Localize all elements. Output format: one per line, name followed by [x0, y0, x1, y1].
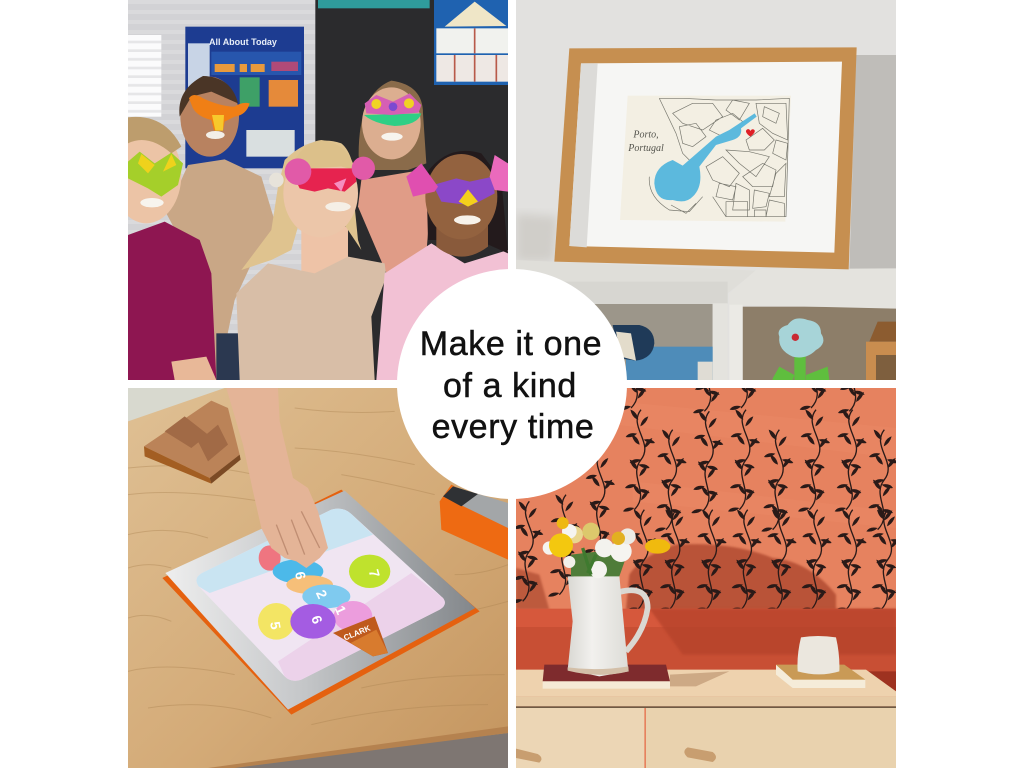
cast shadow on sideboard: [670, 671, 729, 686]
map label second line: Portugal: [627, 143, 664, 154]
magnetic tray: [162, 490, 480, 715]
orange box: [440, 485, 508, 560]
rolled tube: [613, 325, 654, 361]
heart: [746, 129, 755, 137]
wood grain: [128, 408, 508, 725]
heading: of a kind: [443, 367, 577, 405]
tan book: [776, 665, 865, 688]
sideboard: [516, 670, 896, 768]
centre circle callout: [397, 269, 627, 499]
red book: [543, 665, 670, 689]
panel: children wearing colourful masks: [111, 0, 508, 380]
mask: red mouse: [294, 168, 356, 192]
felt flower: [773, 318, 829, 380]
mask: purple with pink wings: [433, 177, 495, 204]
map artwork: [620, 96, 791, 222]
left wall shadow: [516, 568, 549, 610]
child's hand and arm: [226, 388, 328, 568]
scoop numbers: 1: [332, 603, 350, 617]
blue book on shelf: [626, 347, 713, 380]
yellow tulips: [549, 517, 670, 557]
river and lake: [654, 113, 757, 201]
scoop numbers: 2: [313, 587, 331, 601]
white candle: [797, 636, 839, 674]
window with bright blinds: [128, 35, 161, 117]
mask: green and yellow: [128, 152, 183, 197]
tray picture: [196, 509, 445, 681]
background floor top left: [128, 388, 225, 421]
map streets: [649, 98, 789, 217]
interior of left shelf: [594, 304, 713, 369]
white pitcher: [568, 575, 648, 676]
wall shadow: [626, 544, 836, 610]
wainscot ledge: [516, 609, 896, 691]
ice cream cone: CLARK: [342, 624, 372, 642]
right shelf unit: [729, 268, 896, 380]
scoop numbers: 7: [366, 568, 383, 579]
picture frame: [554, 47, 857, 269]
poster title: All About Today: [209, 37, 277, 47]
mask: orange: [189, 95, 250, 131]
classroom poster: [185, 27, 304, 168]
scoop numbers: 6: [292, 570, 309, 581]
interior of right shelf: [743, 307, 896, 380]
chalkboard: [315, 0, 508, 380]
drawer knob right: [684, 747, 716, 762]
teal strip: [318, 0, 430, 8]
drawer knob left: [516, 749, 541, 763]
flower bouquet: [543, 517, 670, 578]
scoop numbers: [267, 568, 383, 631]
panel: magnetic ice cream puzzle on a table: [128, 388, 508, 768]
frame shadow on wall: [849, 55, 896, 270]
scoop numbers: 6: [308, 613, 326, 626]
classroom house chart: [434, 0, 508, 85]
heading: Make it one: [420, 325, 602, 363]
cutting board: [144, 401, 241, 484]
ice cream scoops: [258, 545, 390, 640]
panel: framed map on a shelf: [516, 0, 896, 380]
child: boy in beige: [166, 76, 276, 380]
child: left boy in magenta: [128, 116, 216, 380]
ice cream cone: [333, 616, 388, 656]
left shelf unit: [564, 282, 728, 380]
mask: green with flowers: [364, 113, 421, 126]
table edge and floor: [218, 733, 508, 768]
sun streaks on the wall: [616, 401, 896, 528]
left wall shadow: [516, 213, 558, 262]
child: girl behind in salmon: [358, 81, 430, 277]
child: centre girl in oatmeal sweater: [236, 140, 386, 380]
map label: Porto,: [632, 129, 659, 140]
panel: vase on a sideboard with vine wallpaper: [511, 308, 902, 768]
heading: every time: [432, 408, 594, 446]
vine wallpaper: [511, 308, 902, 612]
child: right girl in pink top: [376, 151, 508, 380]
scoop numbers: 5: [267, 620, 284, 631]
wooden block: [866, 322, 896, 380]
